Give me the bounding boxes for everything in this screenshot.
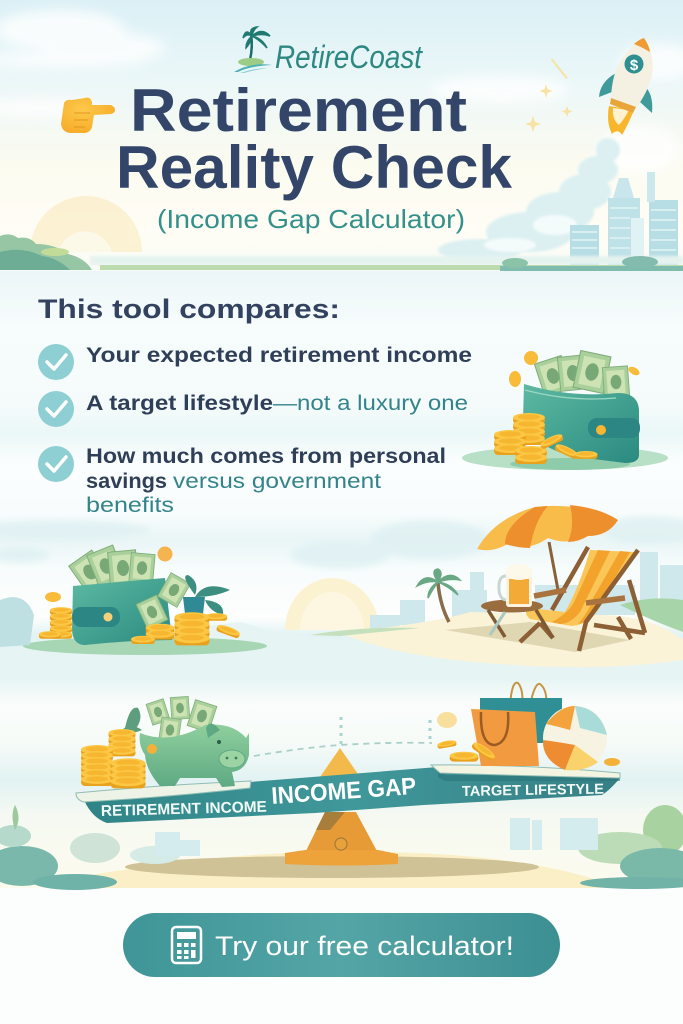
dashed balance line — [254, 743, 432, 756]
background: scale band — [0, 680, 683, 888]
smoke highlights — [484, 215, 577, 252]
header clouds — [0, 10, 683, 175]
background: header sky — [0, 0, 683, 271]
check item: savings versus benefits: How much comes from personal — [86, 445, 446, 468]
beach skyline — [370, 552, 683, 630]
beer mug — [499, 564, 533, 607]
check item: target lifestyle — [38, 391, 468, 427]
distant city — [155, 818, 598, 856]
piggy bank with cash and coins — [81, 696, 249, 788]
title: Reality Check — [116, 134, 513, 201]
table — [481, 600, 553, 638]
check item: savings versus benefits: benefits — [86, 494, 174, 517]
illustration: wallet with cash and plant — [0, 545, 267, 655]
foliage right — [578, 805, 683, 889]
icon: calculator — [172, 927, 201, 963]
subtitle: (Income Gap Calculator) — [157, 204, 465, 234]
check item: savings versus benefits: savings — [86, 470, 167, 493]
checklist — [38, 344, 472, 517]
icon: pointing hand emoji — [61, 98, 115, 133]
check item: expected income: Your expected retirement income — [86, 344, 472, 367]
beam label: target lifestyle: TARGET LIFESTYLE — [462, 782, 604, 800]
sparkles — [525, 58, 572, 132]
ground sand — [90, 852, 600, 888]
heading: this tool compares: This tool compares: — [38, 294, 340, 324]
button label: Try our free calculator! — [215, 931, 514, 961]
check item: target lifestyle: —not a luxury one — [273, 392, 468, 415]
title — [116, 77, 513, 201]
shopping bags, coins and beach ball — [437, 683, 620, 770]
background: tool comparison band — [0, 271, 683, 540]
background: footer — [0, 888, 683, 1024]
call to action button — [123, 913, 560, 977]
header sun — [30, 196, 142, 252]
background: beach band — [0, 540, 683, 680]
check item: expected income — [38, 344, 472, 380]
illustration: wallet with cash and coins — [462, 351, 668, 470]
illustration: beach umbrella, chair and beer — [477, 505, 645, 651]
logo: RetireCoast — [234, 27, 423, 75]
dotted guides — [341, 717, 430, 745]
title: Retirement — [130, 77, 467, 144]
icon: rocket — [599, 38, 653, 135]
header landscape strip — [0, 234, 683, 271]
fulcrum — [285, 748, 398, 866]
beam — [76, 765, 620, 823]
deck chair — [520, 547, 645, 651]
beach sun — [285, 578, 379, 630]
logo wordmark: RetireCoast — [275, 39, 423, 75]
umbrella — [477, 505, 618, 590]
rocket smoke — [438, 138, 620, 261]
skyline — [570, 172, 678, 265]
icon: rocket: $ — [630, 57, 639, 74]
band clouds behind beach — [0, 516, 683, 569]
check item: target lifestyle: A target lifestyle — [86, 392, 273, 415]
check item: savings versus benefits — [38, 445, 446, 517]
check item: savings versus benefits: versus government — [173, 470, 381, 493]
palm tree — [417, 569, 460, 622]
illustration: seesaw income gap — [0, 683, 683, 890]
foliage left — [0, 805, 180, 890]
sea and sand — [0, 598, 683, 680]
beam label: income gap: INCOME GAP — [271, 773, 417, 810]
icon: palm island — [234, 27, 272, 73]
beam label: retirement income: RETIREMENT INCOME — [101, 799, 267, 820]
